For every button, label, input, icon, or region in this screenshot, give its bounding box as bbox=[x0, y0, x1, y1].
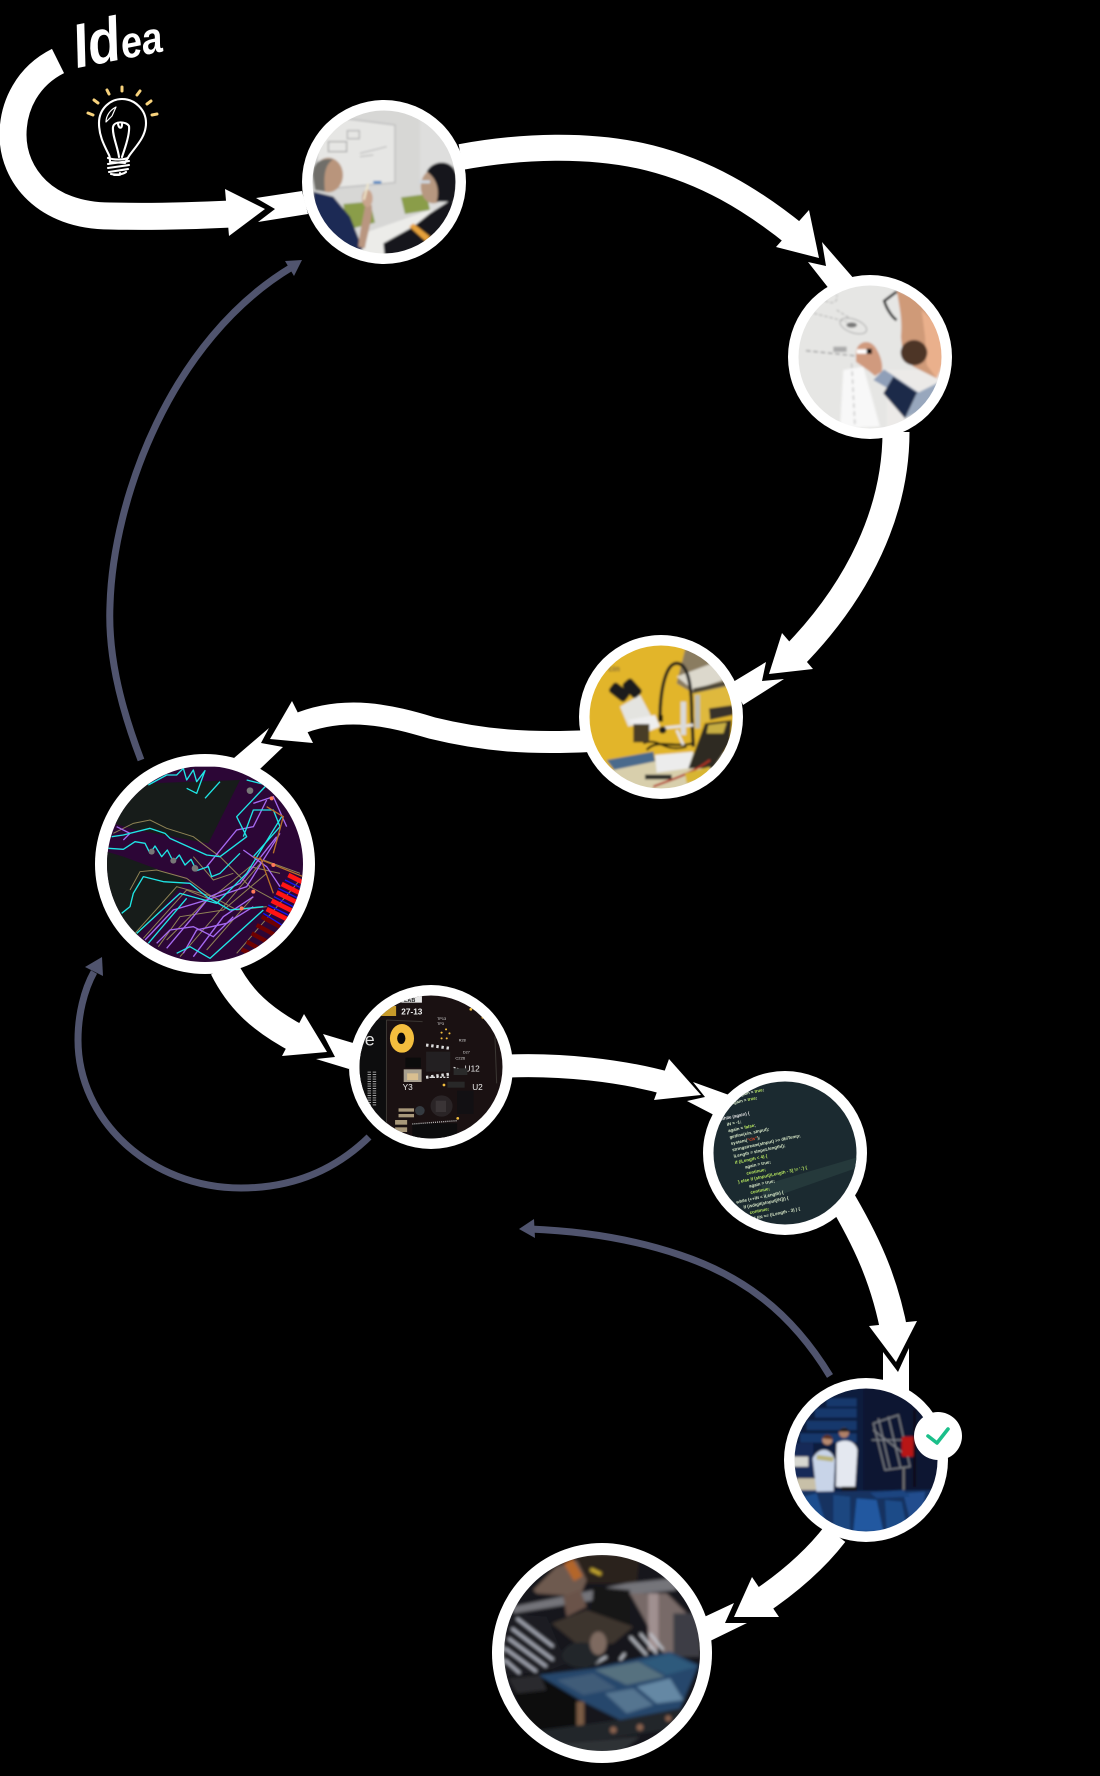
step 6 photo: source code on screen: if (iLength < 4) { bbox=[734, 1153, 768, 1165]
step 6 photo: source code on screen: if (isdigit(sInput[iN])) { bbox=[743, 1195, 789, 1210]
step 5 photo: circuit board close-up: D27 bbox=[463, 1050, 470, 1054]
step 6 photo: source code on screen: system("cls"); bbox=[730, 1135, 761, 1146]
step 6 photo: source code on screen: continue; bbox=[746, 1167, 767, 1176]
step 6 photo: source code on screen: while (again) { bbox=[719, 1111, 750, 1122]
step 5 photo: circuit board close-up: TP3 bbox=[437, 1022, 444, 1026]
icon: green check badge bbox=[914, 1412, 962, 1460]
step 8 photo: PCB assembly machine bbox=[492, 1543, 712, 1763]
step 6 photo: source code on screen: iN = -1; bbox=[726, 1119, 742, 1127]
step 6 photo: source code on screen: again = true; bbox=[745, 1159, 772, 1170]
step 6 photo: source code on screen: stringstream(sInput) >> dblTemp; bbox=[732, 1133, 801, 1152]
step 6 photo: source code on screen: double dblTemp; bbox=[724, 1081, 760, 1093]
title: Idea: Idea bbox=[67, 0, 167, 82]
icon: light bulb bbox=[88, 87, 157, 175]
arrow: step 2 to step 3 bbox=[733, 432, 896, 705]
step 6 photo: source code on screen bbox=[703, 1071, 867, 1235]
step 5 photo: circuit board close-up: LAB bbox=[404, 998, 415, 1004]
step 5 photo: circuit board close-up: C226 bbox=[455, 1055, 466, 1060]
feedback arrow: step 7 back to step 6 bbox=[519, 1219, 830, 1376]
step 7 photo: antenna test chamber bbox=[784, 1378, 948, 1542]
step 2 photo: man writing on whiteboard bbox=[788, 275, 952, 439]
step 4 photo: PCB layout traces bbox=[95, 754, 315, 974]
feedback arrow: step 5 back to step 4 bbox=[78, 957, 369, 1188]
step 6 photo: source code on screen: again = true; bbox=[731, 1095, 758, 1105]
step 6 photo: source code on screen: iLength = sInput.length(); bbox=[733, 1143, 786, 1159]
step 6 photo: source code on screen: while (++iN < iLength) { bbox=[735, 1190, 784, 1205]
step 6 photo: source code on screen: if (iN == (iLength - 3) ) { bbox=[752, 1206, 801, 1221]
step 6 photo: source code on screen: bool again = true; bbox=[728, 1087, 765, 1100]
step 6 photo: source code on screen: getline(cin, sInput); bbox=[729, 1126, 770, 1140]
arrow: step 5 to step 6 bbox=[508, 1059, 729, 1115]
arrow: step 4 to step 5 bbox=[224, 968, 353, 1069]
arrow: step 7 to step 8 bbox=[702, 1534, 835, 1642]
step 6 photo: source code on screen: again = false; bbox=[728, 1122, 757, 1133]
step 5 photo: circuit board close-up: U12 bbox=[465, 1065, 480, 1074]
arrow: idea to step 1 bbox=[13, 61, 308, 236]
step 5 photo: circuit board close-up: TP13 bbox=[437, 1017, 446, 1021]
arrow: step 3 to step 4 bbox=[234, 701, 590, 769]
step 6 photo: source code on screen: again = true; bbox=[749, 1178, 776, 1189]
arrow: step 1 to step 2 bbox=[461, 148, 855, 290]
arrow: step 6 to step 7 bbox=[838, 1193, 917, 1395]
step 5 photo: circuit board close-up: e bbox=[365, 1030, 375, 1049]
step 1 photo: meeting at whiteboard bbox=[302, 100, 466, 264]
feedback arrow: step 4 back to step 1 bbox=[110, 260, 302, 760]
step 5 photo: circuit board close-up: R28 bbox=[459, 1039, 466, 1043]
step 6 photo: source code on screen: continue; bbox=[750, 1186, 771, 1195]
step 3 photo: microscope on yellow wall: cin bbox=[608, 665, 620, 674]
step 5 photo: circuit board close-up: U2 bbox=[472, 1083, 483, 1092]
step 3 photo: microscope on yellow wall bbox=[579, 635, 743, 799]
step 5 photo: circuit board close-up bbox=[349, 985, 513, 1149]
step 5 photo: circuit board close-up: Y3 bbox=[403, 1083, 413, 1092]
step 6 photo: source code on screen: } else if (sInput[iLength - 3] != '.') { bbox=[737, 1165, 808, 1184]
step 6 photo: source code on screen: continue; bbox=[749, 1206, 770, 1215]
step 5 photo: circuit board close-up: 27-13 bbox=[401, 1008, 423, 1017]
